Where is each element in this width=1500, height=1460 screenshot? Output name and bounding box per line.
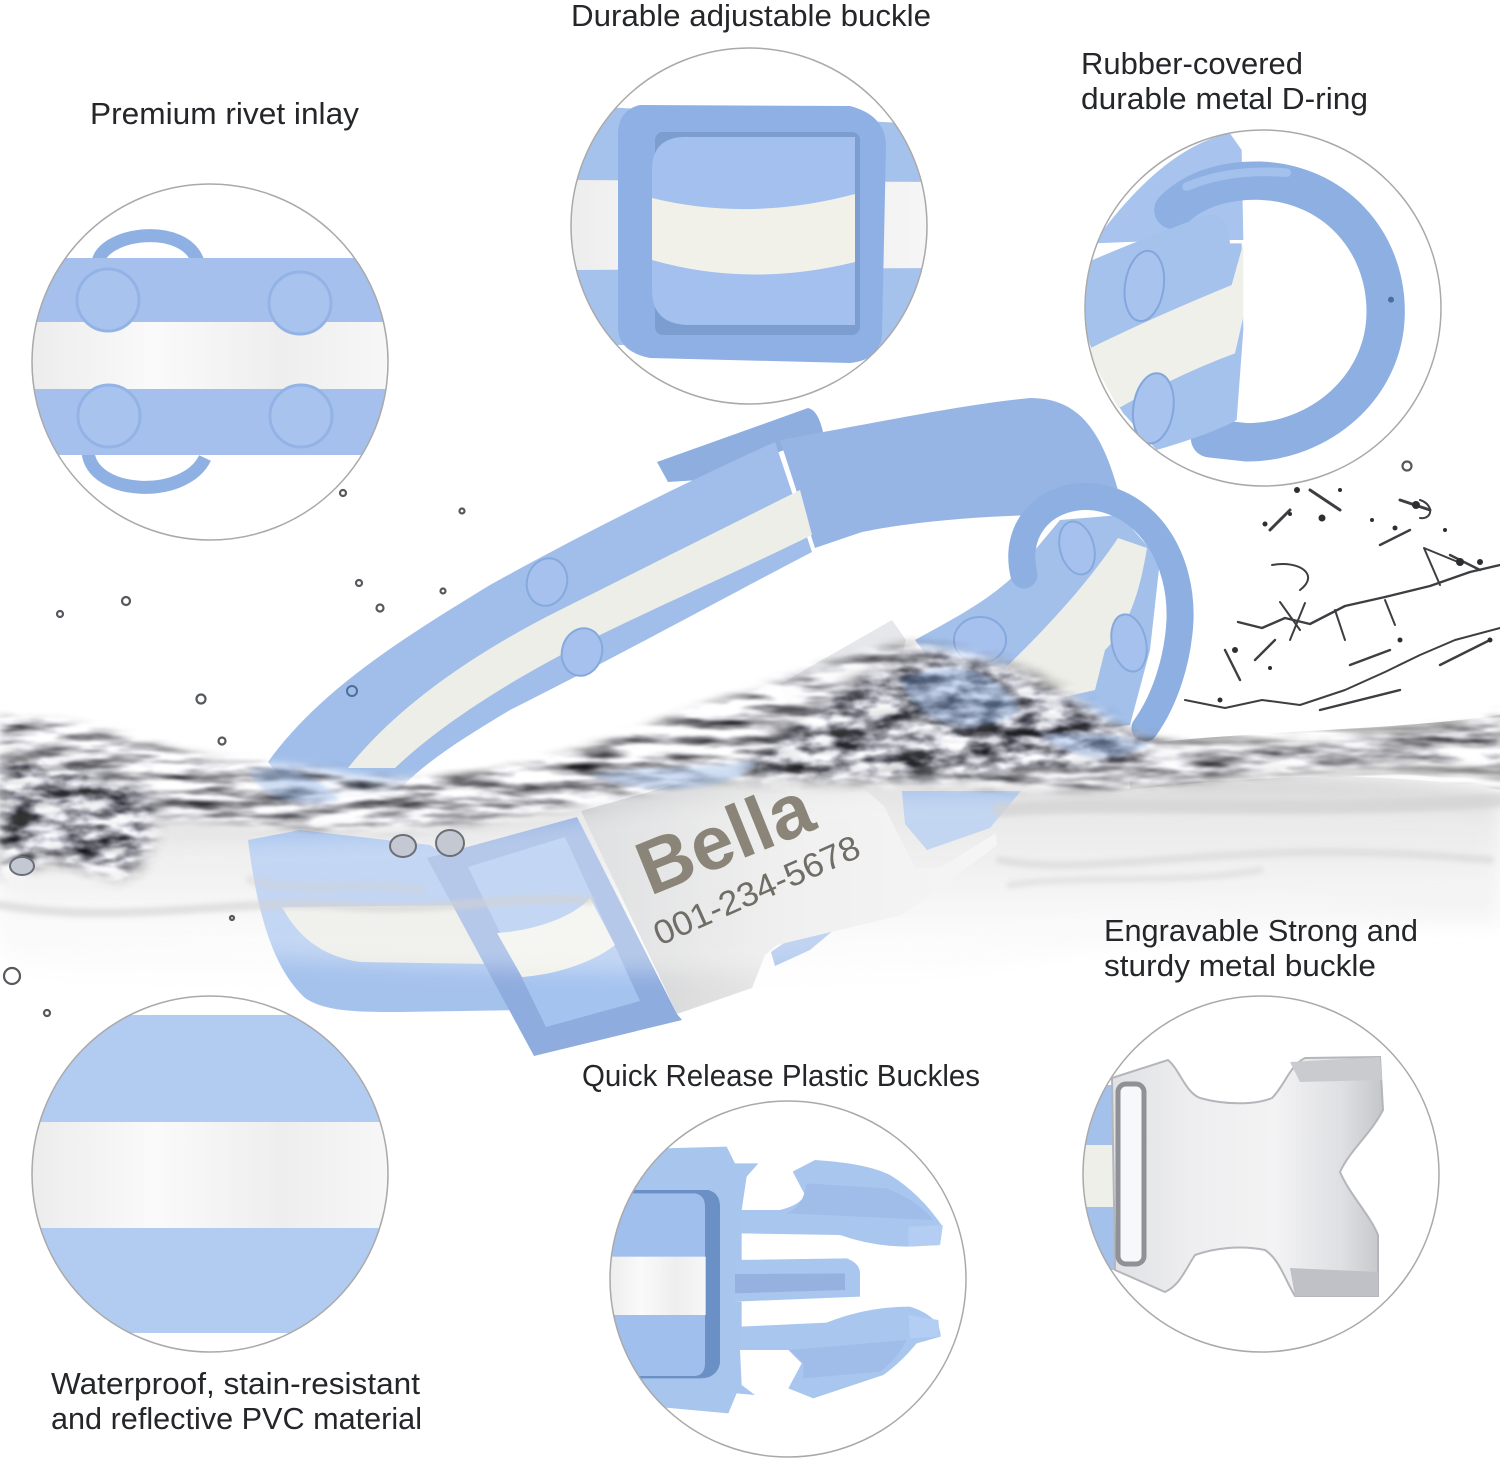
D-ring top [98, 236, 198, 262]
buckle: metal plate [581, 763, 997, 1014]
collar: upper strap [268, 442, 812, 800]
surface band [0, 646, 1500, 869]
circle panel: premium rivet inlay [30, 184, 390, 540]
circle panel: quick release plastic buckle [600, 1101, 966, 1457]
reflective band [607, 1257, 706, 1315]
collar: D-ring [1022, 497, 1180, 728]
strap [30, 1015, 390, 1333]
stripe [565, 180, 940, 270]
collar: right strap section [915, 515, 1160, 735]
collar: wide strap end [780, 398, 1118, 548]
collar: keeper loop [657, 408, 823, 482]
ring pin dot [1388, 297, 1394, 303]
middle prong [735, 1258, 860, 1302]
D-ring bottom [88, 452, 205, 487]
strap [607, 1193, 705, 1376]
ring [1173, 181, 1386, 442]
collar: upper rivets [521, 554, 608, 680]
collar: lower strap [248, 830, 525, 1012]
reflective stripe [1087, 243, 1243, 408]
label: metal buckle: sturdy metal buckle [1104, 948, 1376, 983]
underwater streaks [0, 800, 1500, 913]
buckle: engraved name: Bella [625, 765, 826, 912]
water behind the collar [0, 715, 1500, 1010]
rivets [77, 269, 332, 447]
frame [634, 1146, 758, 1414]
hanging droplets [10, 830, 464, 875]
right water spray [1185, 487, 1500, 710]
strap [1086, 1085, 1114, 1270]
label: D-ring: durable metal D-ring [1081, 81, 1368, 116]
water droplets around collar [4, 462, 1412, 1016]
label: PVC material: Waterproof, stain-resistant [51, 1366, 420, 1401]
label: D-ring: Rubber-covered [1081, 46, 1303, 81]
label: PVC material: and reflective PVC material [51, 1401, 422, 1436]
buckle: blue strap under tip [771, 908, 860, 966]
circle panel: PVC material [30, 996, 390, 1352]
collar: keeper window strap [468, 837, 640, 1027]
strap roll [652, 137, 855, 325]
inner shadow [632, 1190, 720, 1378]
front strap [1080, 214, 1243, 450]
collar: keeper reflective stripe [497, 898, 615, 977]
buckle: blue strap in notch [902, 791, 1021, 850]
metal body [1112, 1057, 1383, 1296]
buckle: upper metal tab [780, 620, 906, 740]
bottom prong texture [790, 1340, 907, 1378]
product: blue collar with engraved buckle [248, 398, 1180, 1056]
buckle window [655, 132, 860, 335]
strap [30, 258, 390, 455]
circle panel: rubber-covered D-ring [1080, 130, 1441, 486]
water surface splash overlay [0, 646, 1500, 972]
top prong [740, 1160, 943, 1247]
circle panel: durable adjustable buckle [565, 48, 940, 404]
label: premium rivet inlay: Premium rivet inlay [90, 96, 360, 131]
bottom prong [740, 1307, 941, 1398]
blue reflections in splash [250, 668, 1150, 804]
underwater haze [0, 793, 1500, 972]
metal slot [1118, 1084, 1144, 1264]
reflective stripe [30, 322, 390, 389]
collar: right reflective stripe [1005, 538, 1147, 698]
metal upper shade [1290, 1057, 1382, 1082]
reflective stripe [1084, 1145, 1113, 1207]
top prong tip [908, 1225, 943, 1247]
bottom prong tip [908, 1315, 940, 1338]
back strap [1093, 133, 1243, 243]
ring top highlight [1187, 172, 1287, 187]
top prong texture [787, 1183, 933, 1220]
collar: lower reflective stripe [282, 905, 490, 964]
strap [565, 105, 940, 345]
left water clump [0, 757, 154, 875]
collar: plastic keeper frame [427, 817, 682, 1056]
rivets [1124, 250, 1175, 444]
middle prong texture [735, 1273, 845, 1293]
label: metal buckle: Engravable Strong and [1104, 913, 1418, 948]
collar: reflective stripe [348, 490, 812, 768]
splash detail over D-ring [740, 655, 1160, 778]
buckle frame [618, 105, 886, 363]
label: quick release plastic buckles: Quick Release Plastic Buckles [582, 1058, 980, 1093]
roll reflective stripe [652, 194, 855, 275]
collar: right rivets [954, 518, 1152, 675]
circle panel: metal buckle [1083, 996, 1439, 1352]
metal lower shade [1290, 1268, 1378, 1296]
collar: rivet hole [347, 686, 357, 696]
reflective stripe [30, 1122, 390, 1228]
buckle: engraved phone number: 001-234-5678 [648, 828, 866, 953]
